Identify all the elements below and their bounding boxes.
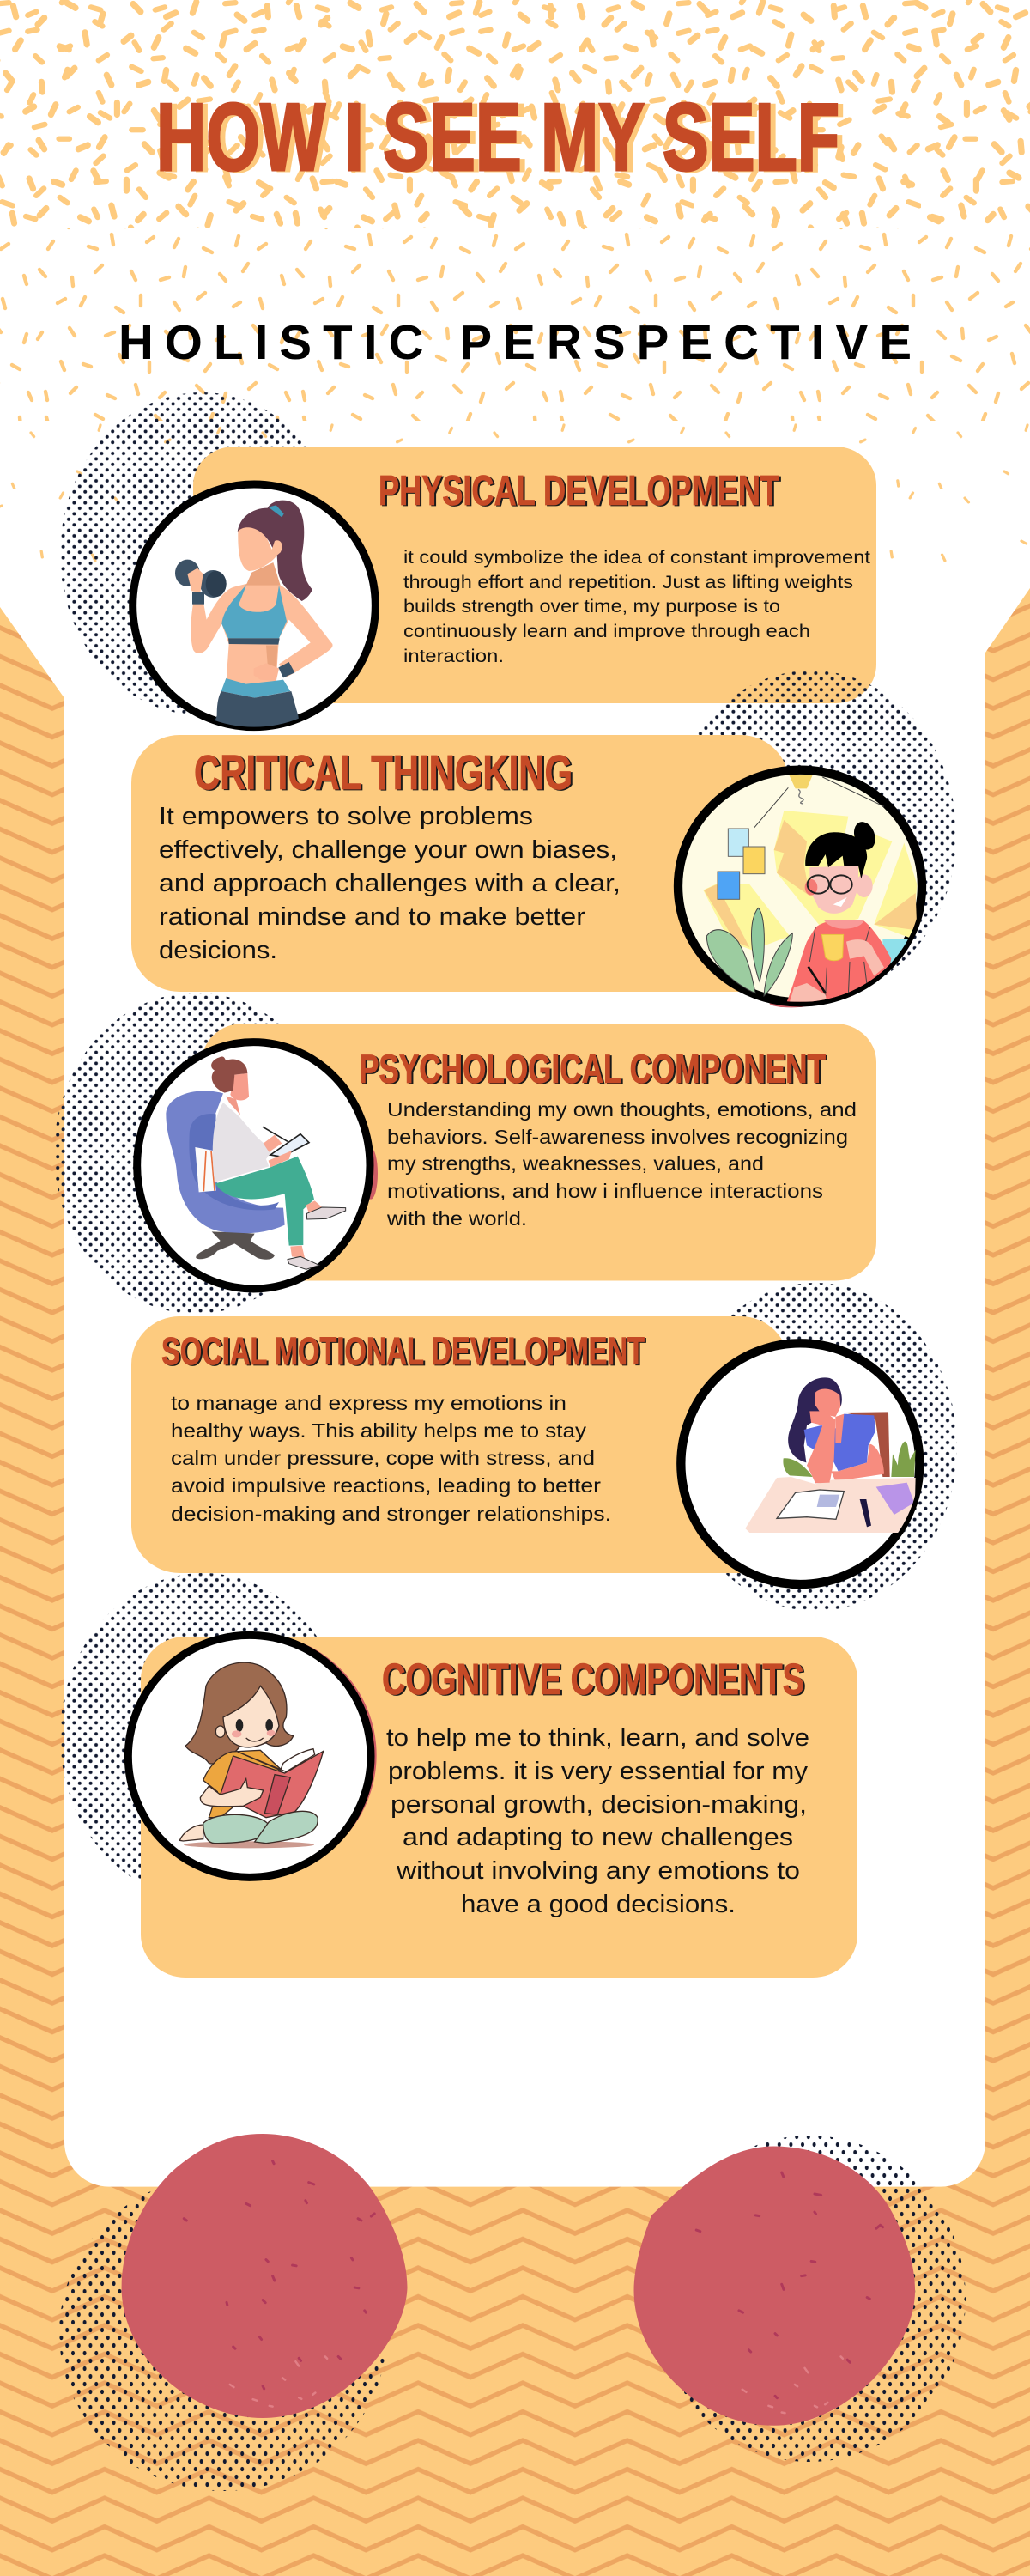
body text: avoid impulsive reactions, leading to better <box>171 1474 601 1497</box>
halftone blob bottom right <box>653 2136 966 2462</box>
heading: CRITICAL THINGKING <box>196 746 574 801</box>
panel: cognitive components <box>128 1632 857 1978</box>
body text: behaviors. Self-awareness involves recognizing <box>387 1126 848 1148</box>
body text <box>171 1392 611 1525</box>
body text: interaction. <box>403 646 504 666</box>
body text: calm under pressure, cope with stress, and <box>171 1447 595 1469</box>
panel: psychological component <box>137 1024 876 1289</box>
card background <box>131 1316 789 1573</box>
body text: healthy ways. This ability helps me to stay <box>171 1419 587 1442</box>
halftone blob 1 <box>60 392 343 715</box>
body text: builds strength over time, my purpose is to <box>403 596 780 617</box>
body text: effectively, challenge your own biases, <box>159 836 617 864</box>
body text: rational mindse and to make better <box>159 903 585 931</box>
red blob left <box>122 2134 407 2418</box>
icon: woman studying at table <box>681 1343 919 1584</box>
body text: desicions. <box>159 937 277 964</box>
heading: COGNITIVE COMPONENTS <box>384 1656 806 1704</box>
body text: with the world. <box>386 1207 527 1230</box>
icon: woman with glasses and mug <box>678 770 922 1007</box>
body text: through effort and repetition. Just as lifting weights <box>403 572 853 592</box>
speckle pattern top <box>0 0 1030 584</box>
chevron orange background <box>0 584 1030 2576</box>
body text: problems. it is very essential for my <box>388 1758 809 1785</box>
white central panel <box>64 601 985 2187</box>
body text: have a good decisions. <box>461 1891 736 1918</box>
body text: my strengths, weaknesses, values, and <box>387 1152 764 1175</box>
body text: motivations, and how i influence interactions <box>387 1180 823 1202</box>
panel: physical development <box>133 447 876 730</box>
card background <box>202 1024 876 1281</box>
body text: Understanding my own thoughts, emotions, and <box>387 1098 857 1121</box>
card background <box>131 735 789 992</box>
card background <box>193 447 876 703</box>
body text: and approach challenges with a clear, <box>159 870 621 897</box>
halftone blob bottom left <box>59 2175 387 2491</box>
heading: COGNITIVE COMPONENTS <box>382 1655 804 1704</box>
heading: PHYSICAL DEVELOPMENT <box>379 468 779 514</box>
heading: SOCIAL MOTIONAL DEVELOPMENT <box>161 1329 645 1373</box>
halftone blob 5 <box>60 1573 347 1899</box>
halftone blob 3 <box>54 993 337 1314</box>
heading: PHYSICAL DEVELOPMENT <box>380 469 781 515</box>
red blob right <box>634 2147 915 2426</box>
body text: and adapting to new challenges <box>403 1824 793 1851</box>
body text: continuously learn and improve through each <box>403 621 810 641</box>
icon: girl reading a book <box>128 1632 377 1878</box>
body text: It empowers to solve problems <box>159 803 533 830</box>
card background <box>141 1637 857 1978</box>
heading: SOCIAL MOTIONAL DEVELOPMENT <box>163 1330 646 1374</box>
icon: woman lifting dumbbell <box>133 484 375 730</box>
heading: PSYCHOLOGICAL COMPONENT <box>359 1046 826 1091</box>
subtitle: HOLISTIC PERSPECTIVE <box>118 315 912 369</box>
body text: to manage and express my emotions in <box>171 1392 566 1414</box>
body text <box>403 547 870 666</box>
body text <box>386 1098 857 1230</box>
body text: it could symbolize the idea of constant improvement <box>403 547 870 568</box>
halftone blob 4 <box>674 1283 957 1611</box>
panel: critical thinking <box>131 735 922 1007</box>
heading: PSYCHOLOGICAL COMPONENT <box>360 1047 827 1092</box>
halftone blob 2 <box>666 671 956 999</box>
body text: decision-making and stronger relationships. <box>171 1503 611 1525</box>
body text <box>386 1724 809 1918</box>
heading: CRITICAL THINGKING <box>194 745 573 800</box>
body text: without involving any emotions to <box>396 1857 800 1885</box>
body text <box>159 803 621 964</box>
body text: to help me to think, learn, and solve <box>386 1724 809 1752</box>
panel: social emotional development <box>131 1316 919 1584</box>
icon: woman in armchair with clipboard <box>137 1042 378 1289</box>
body text: personal growth, decision-making, <box>391 1791 807 1819</box>
